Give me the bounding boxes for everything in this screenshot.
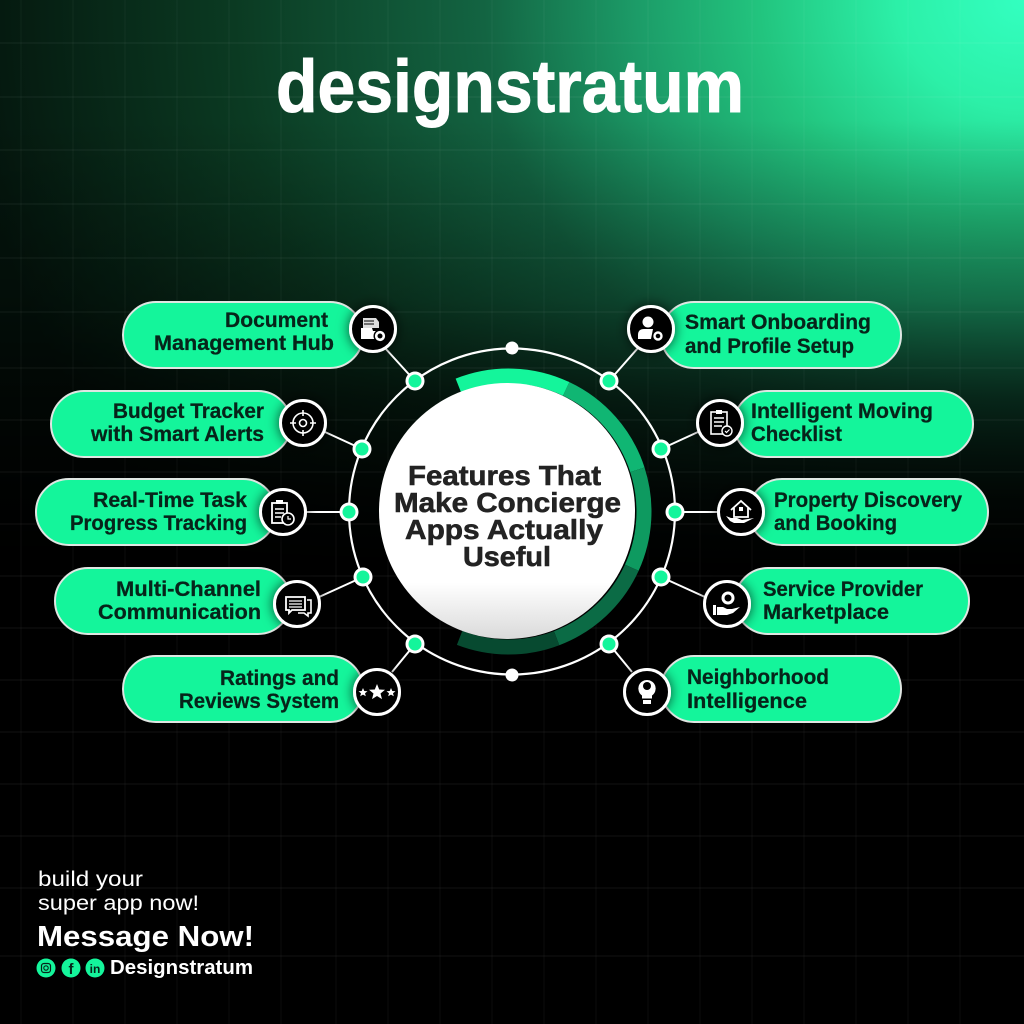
icon: gear on hand — [704, 582, 750, 626]
feature: Real-Time Task Progress Tracking: Progress Tracking — [70, 512, 247, 535]
tagline: build your — [38, 868, 143, 891]
icon: target — [280, 400, 326, 446]
feature: Property Discovery and Booking — [718, 479, 988, 545]
feature: Property Discovery and Booking: Property Discovery — [774, 489, 962, 512]
feature: Budget Tracker with Smart Alerts: with Smart Alerts — [90, 423, 264, 446]
centre title: Features That — [408, 460, 601, 491]
logo wordmark: designstratum — [276, 45, 744, 128]
feature: Budget Tracker with Smart Alerts: Budget Tracker — [113, 400, 264, 423]
icon: user gear — [628, 306, 674, 352]
social icons: in — [90, 962, 100, 976]
tagline: super app now! — [38, 892, 199, 915]
feature: Intelligent Moving Checklist: Intelligent Moving — [751, 400, 933, 423]
feature: Property Discovery and Booking: and Booking — [774, 512, 897, 535]
feature: Document Management Hub: Management Hub — [154, 332, 334, 355]
feature: Neighborhood Intelligence — [624, 656, 901, 722]
feature: Neighborhood Intelligence: Neighborhood — [687, 666, 829, 689]
feature: Budget Tracker with Smart Alerts — [51, 391, 326, 457]
feature: Ratings and Reviews System: Ratings and — [220, 667, 339, 690]
social icons — [36, 958, 104, 978]
feature: Multi-Channel Communication — [55, 568, 320, 634]
connector lines — [305, 348, 720, 672]
icon: clipboard clock — [260, 490, 306, 534]
segmented progress arc — [458, 376, 644, 647]
feature: Document Management Hub: Document — [225, 309, 328, 332]
message now: Message Now! — [37, 921, 254, 953]
outer ring — [349, 348, 675, 674]
feature: Multi-Channel Communication: Communication — [98, 601, 261, 624]
feature: Neighborhood Intelligence: Intelligence — [687, 690, 807, 713]
centre title — [394, 460, 621, 572]
feature: Multi-Channel Communication: Multi-Channel — [116, 578, 261, 601]
feature: Service Provider Marketplace: Marketplace — [763, 601, 889, 624]
centre title: Apps Actually — [405, 514, 603, 545]
feature: Service Provider Marketplace — [704, 568, 969, 634]
icon: checklist — [698, 400, 742, 446]
icon: house on hand — [718, 490, 764, 534]
icon: chat bubbles — [274, 582, 320, 626]
feature: Smart Onboarding and Profile Setup: Smart Onboarding — [685, 311, 871, 334]
centre circle — [379, 383, 635, 639]
feature: Real-Time Task Progress Tracking — [36, 479, 306, 545]
centre title: Make Concierge — [394, 487, 621, 518]
icon: stars — [354, 670, 400, 714]
feature: Intelligent Moving Checklist: Checklist — [751, 423, 842, 446]
call to action — [36, 868, 254, 979]
brand handle: Designstratum — [110, 957, 253, 979]
icon: document gear — [350, 306, 396, 352]
feature: Ratings and Reviews System — [123, 656, 400, 722]
centre title: Useful — [463, 541, 551, 572]
feature: Smart Onboarding and Profile Setup: and Profile Setup — [685, 335, 854, 358]
feature: Ratings and Reviews System: Reviews System — [179, 690, 339, 713]
tagline — [38, 868, 199, 915]
feature: Intelligent Moving Checklist — [698, 391, 973, 457]
feature: Service Provider Marketplace: Service Provider — [763, 578, 923, 601]
feature: Document Management Hub — [123, 302, 396, 368]
central hub diagram — [305, 342, 720, 682]
social icons: f — [68, 961, 74, 978]
feature: Real-Time Task Progress Tracking: Real-Time Task — [93, 489, 247, 512]
ring nodes — [340, 342, 684, 682]
icon: light bulb — [624, 670, 670, 714]
feature: Smart Onboarding and Profile Setup — [628, 302, 901, 368]
